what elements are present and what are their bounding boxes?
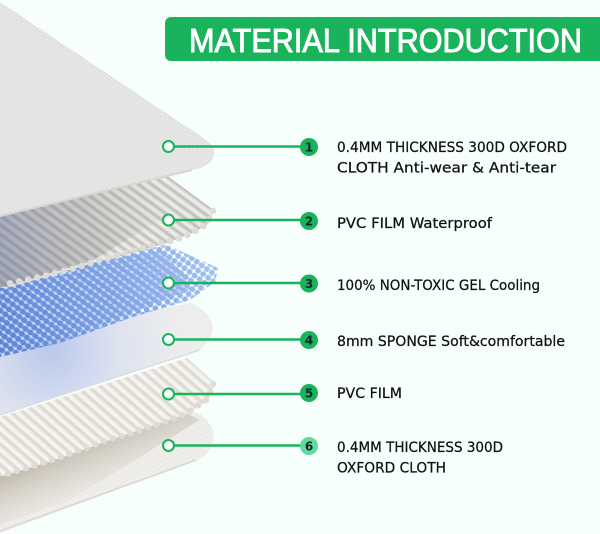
callout 3: 100% NON-TOXIC GEL Cooling <box>337 278 540 294</box>
callout 6: 0.4MM THICKNESS 300D <box>337 440 503 456</box>
layered material illustration <box>0 2 218 533</box>
layer 5: PVC film <box>0 358 216 476</box>
layer 6: oxford cloth <box>0 405 214 533</box>
title: MATERIAL INTRODUCTION <box>189 22 582 59</box>
title banner <box>165 17 600 61</box>
callout 1 <box>163 138 567 176</box>
callout 5 <box>163 384 402 402</box>
callout 2: 2 <box>305 214 313 228</box>
layer 3: cooling gel <box>0 245 218 357</box>
callout 4: 4 <box>305 334 313 348</box>
callout 1: 0.4MM THICKNESS 300D OXFORD <box>337 140 567 156</box>
callout 2: PVC FILM Waterproof <box>337 216 493 232</box>
callout 1: 1 <box>305 140 313 154</box>
layer 4: sponge <box>0 303 213 415</box>
callout 6 <box>163 437 503 476</box>
callout 3 <box>163 274 540 294</box>
layer 1: oxford cloth <box>0 2 214 217</box>
callout 6: 6 <box>305 440 313 454</box>
callout 5: 5 <box>305 386 313 400</box>
callout 4: 8mm SPONGE Soft&comfortable <box>337 334 565 350</box>
callout 1: CLOTH Anti-wear & Anti-tear <box>337 160 556 176</box>
callout 2 <box>163 212 493 232</box>
callout 5: PVC FILM <box>337 386 402 402</box>
callout 3: 3 <box>305 277 313 291</box>
callout 4 <box>163 331 565 350</box>
callout 6: OXFORD CLOTH <box>337 460 446 476</box>
layer 2: PVC film <box>0 174 215 288</box>
